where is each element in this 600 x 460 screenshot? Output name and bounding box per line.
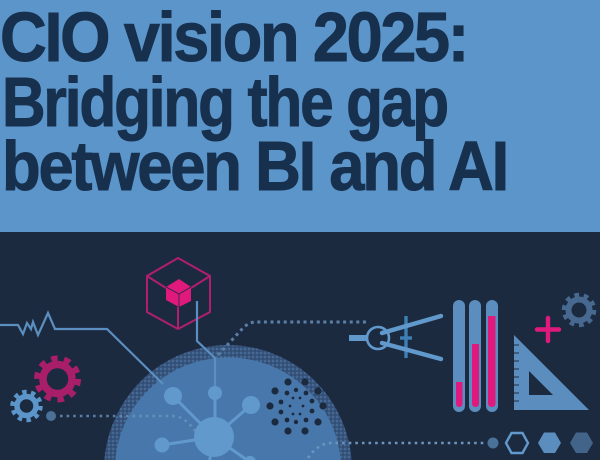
dotted line with node, left (46, 411, 195, 431)
network diagram (154, 386, 260, 460)
bar gauges (453, 300, 498, 412)
icon: blue gear (12, 392, 40, 420)
icon: compass (349, 316, 441, 359)
icon: magenta gear (37, 358, 78, 400)
title (0, 0, 507, 205)
icon: muted hexagon (570, 432, 593, 453)
title: CIO vision 2025: (0, 0, 467, 76)
header panel (0, 0, 600, 232)
dotted line, top (218, 322, 366, 355)
title: Bridging the gap (2, 63, 447, 141)
circuit line with zigzag (0, 313, 163, 384)
title: between BI and AI (2, 127, 507, 205)
icon: wireframe cube (147, 258, 210, 329)
connector from cube to network (197, 301, 215, 395)
blob with speckled edge (104, 345, 352, 460)
icon: outlined hexagon (506, 433, 528, 453)
icon: plus sign (537, 318, 559, 341)
dotted line with node, bottom (308, 438, 498, 458)
icon: filled hexagon (538, 432, 561, 453)
illustration panel (0, 232, 600, 460)
icon: set square (514, 335, 589, 410)
radial dot cluster (266, 378, 327, 435)
icon: grey gear (564, 295, 594, 325)
